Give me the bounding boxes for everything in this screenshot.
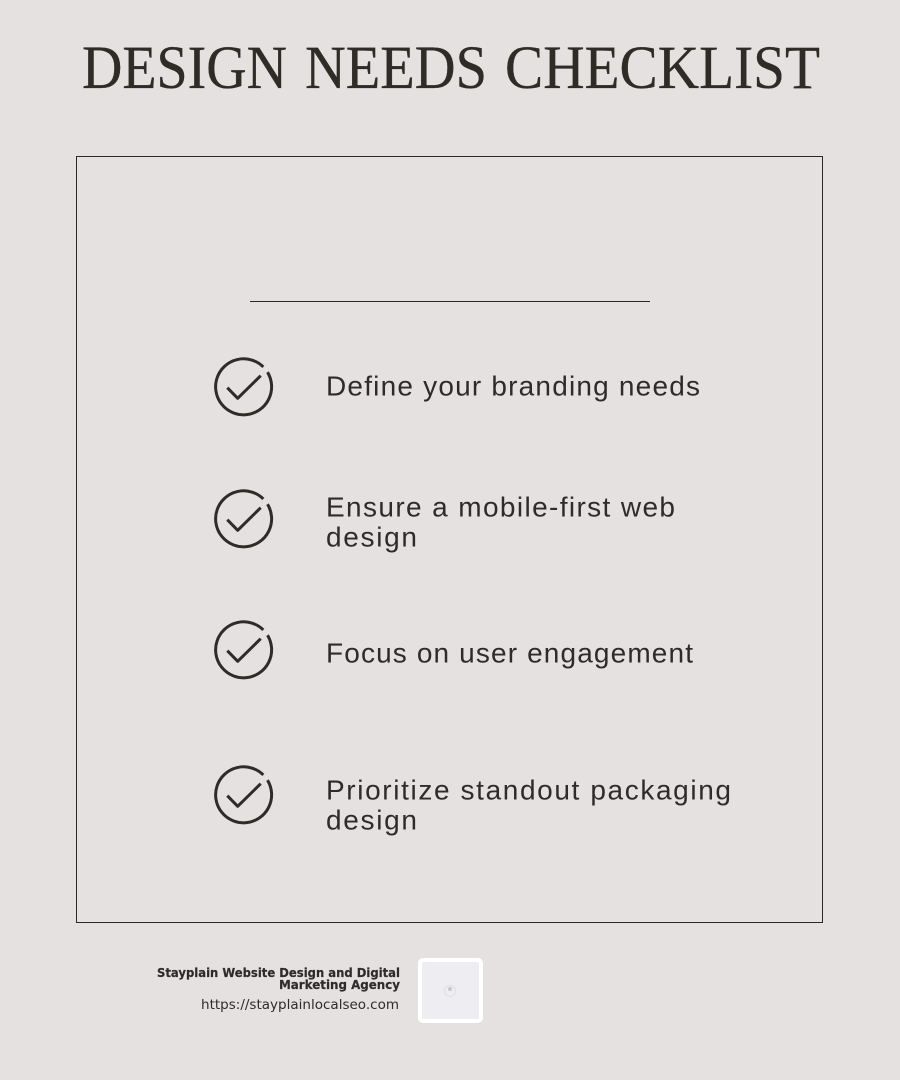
item 3 text: Focus on user engagement xyxy=(326,638,693,668)
item 4 text: design xyxy=(326,804,417,836)
panel: checklist xyxy=(76,156,822,922)
footer url: https://stayplainlocalseo.com xyxy=(201,997,399,1013)
item 1 text: Define your branding needs xyxy=(326,370,700,402)
icon: check 1 xyxy=(216,359,272,415)
title: NEEDS xyxy=(305,35,487,102)
icon: check 4 xyxy=(216,767,272,823)
item 4 text: Prioritize standout packaging xyxy=(326,774,731,806)
title: CHECKLIST xyxy=(505,35,820,102)
item 2 text: Ensure a mobile-first web xyxy=(326,492,675,522)
icon: check 3 xyxy=(216,622,272,678)
title: DESIGN xyxy=(82,35,287,102)
footer logo xyxy=(420,960,481,1021)
footer agency name: Marketing Agency xyxy=(279,977,400,992)
footer agency name: Stayplain Website Design and Digital xyxy=(157,965,400,980)
icon: check 2 xyxy=(216,491,272,547)
item 2 text: design xyxy=(326,522,417,552)
